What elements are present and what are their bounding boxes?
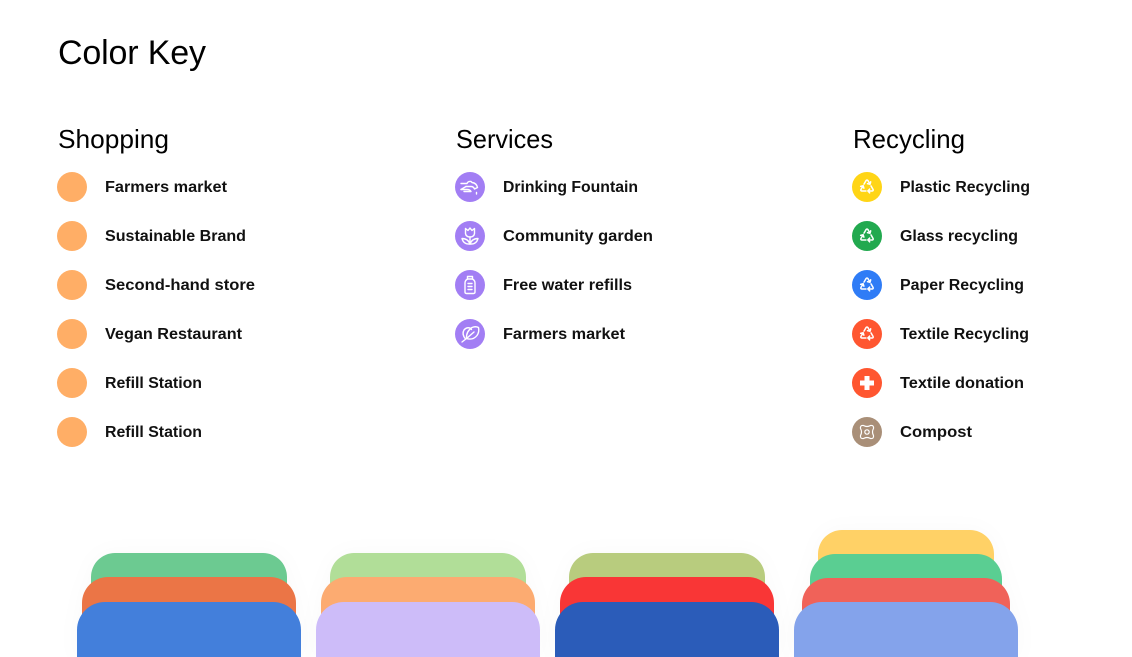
item: community garden (455, 221, 653, 251)
item: vegan restaurant (57, 319, 243, 349)
heading: recycling: Recycling (853, 124, 965, 154)
item: plastic recycling: Plastic Recycling (900, 179, 1030, 196)
title: Color Key (58, 34, 206, 72)
item: textile recycling: Textile Recycling (900, 326, 1029, 343)
item: community garden: Community garden (503, 228, 653, 245)
item: compost (852, 417, 973, 447)
heading: services: Services (456, 124, 553, 154)
item: refill station (57, 368, 202, 398)
card stack 4 (794, 530, 1018, 657)
card stack 1 (77, 553, 301, 657)
item: farmers market (57, 172, 228, 202)
item: farmers market services: Farmers market (503, 326, 626, 343)
panel: services (455, 124, 653, 349)
heading: shopping: Shopping (58, 124, 169, 154)
item: paper recycling (852, 270, 1024, 300)
item: compost: Compost (900, 424, 973, 441)
item: textile recycling (852, 319, 1029, 349)
card stack 3 (555, 553, 779, 657)
item: second-hand store: Second-hand store (105, 277, 255, 294)
item: drinking fountain (455, 172, 638, 202)
item: sustainable brand: Sustainable Brand (105, 228, 246, 245)
item: textile donation (852, 368, 1024, 398)
item: free water refills: Free water refills (503, 277, 632, 294)
item: farmers market: Farmers market (105, 179, 228, 196)
item: textile donation: Textile donation (900, 375, 1024, 392)
item: paper recycling: Paper Recycling (900, 277, 1024, 294)
item: farmers market services (455, 319, 626, 349)
item: refill station second (57, 417, 202, 447)
panel: recycling (852, 124, 1030, 447)
item: refill station second: Refill Station (105, 424, 202, 441)
item: refill station: Refill Station (105, 375, 202, 392)
panel: shopping (57, 124, 255, 447)
item: vegan restaurant: Vegan Restaurant (105, 326, 243, 343)
item: drinking fountain: Drinking Fountain (503, 179, 638, 196)
item: glass recycling (852, 221, 1018, 251)
item: glass recycling: Glass recycling (900, 228, 1018, 245)
card stack 2 (316, 553, 540, 657)
item: plastic recycling (852, 172, 1030, 202)
item: second-hand store (57, 270, 255, 300)
item: sustainable brand (57, 221, 246, 251)
item: free water refills (455, 270, 632, 300)
